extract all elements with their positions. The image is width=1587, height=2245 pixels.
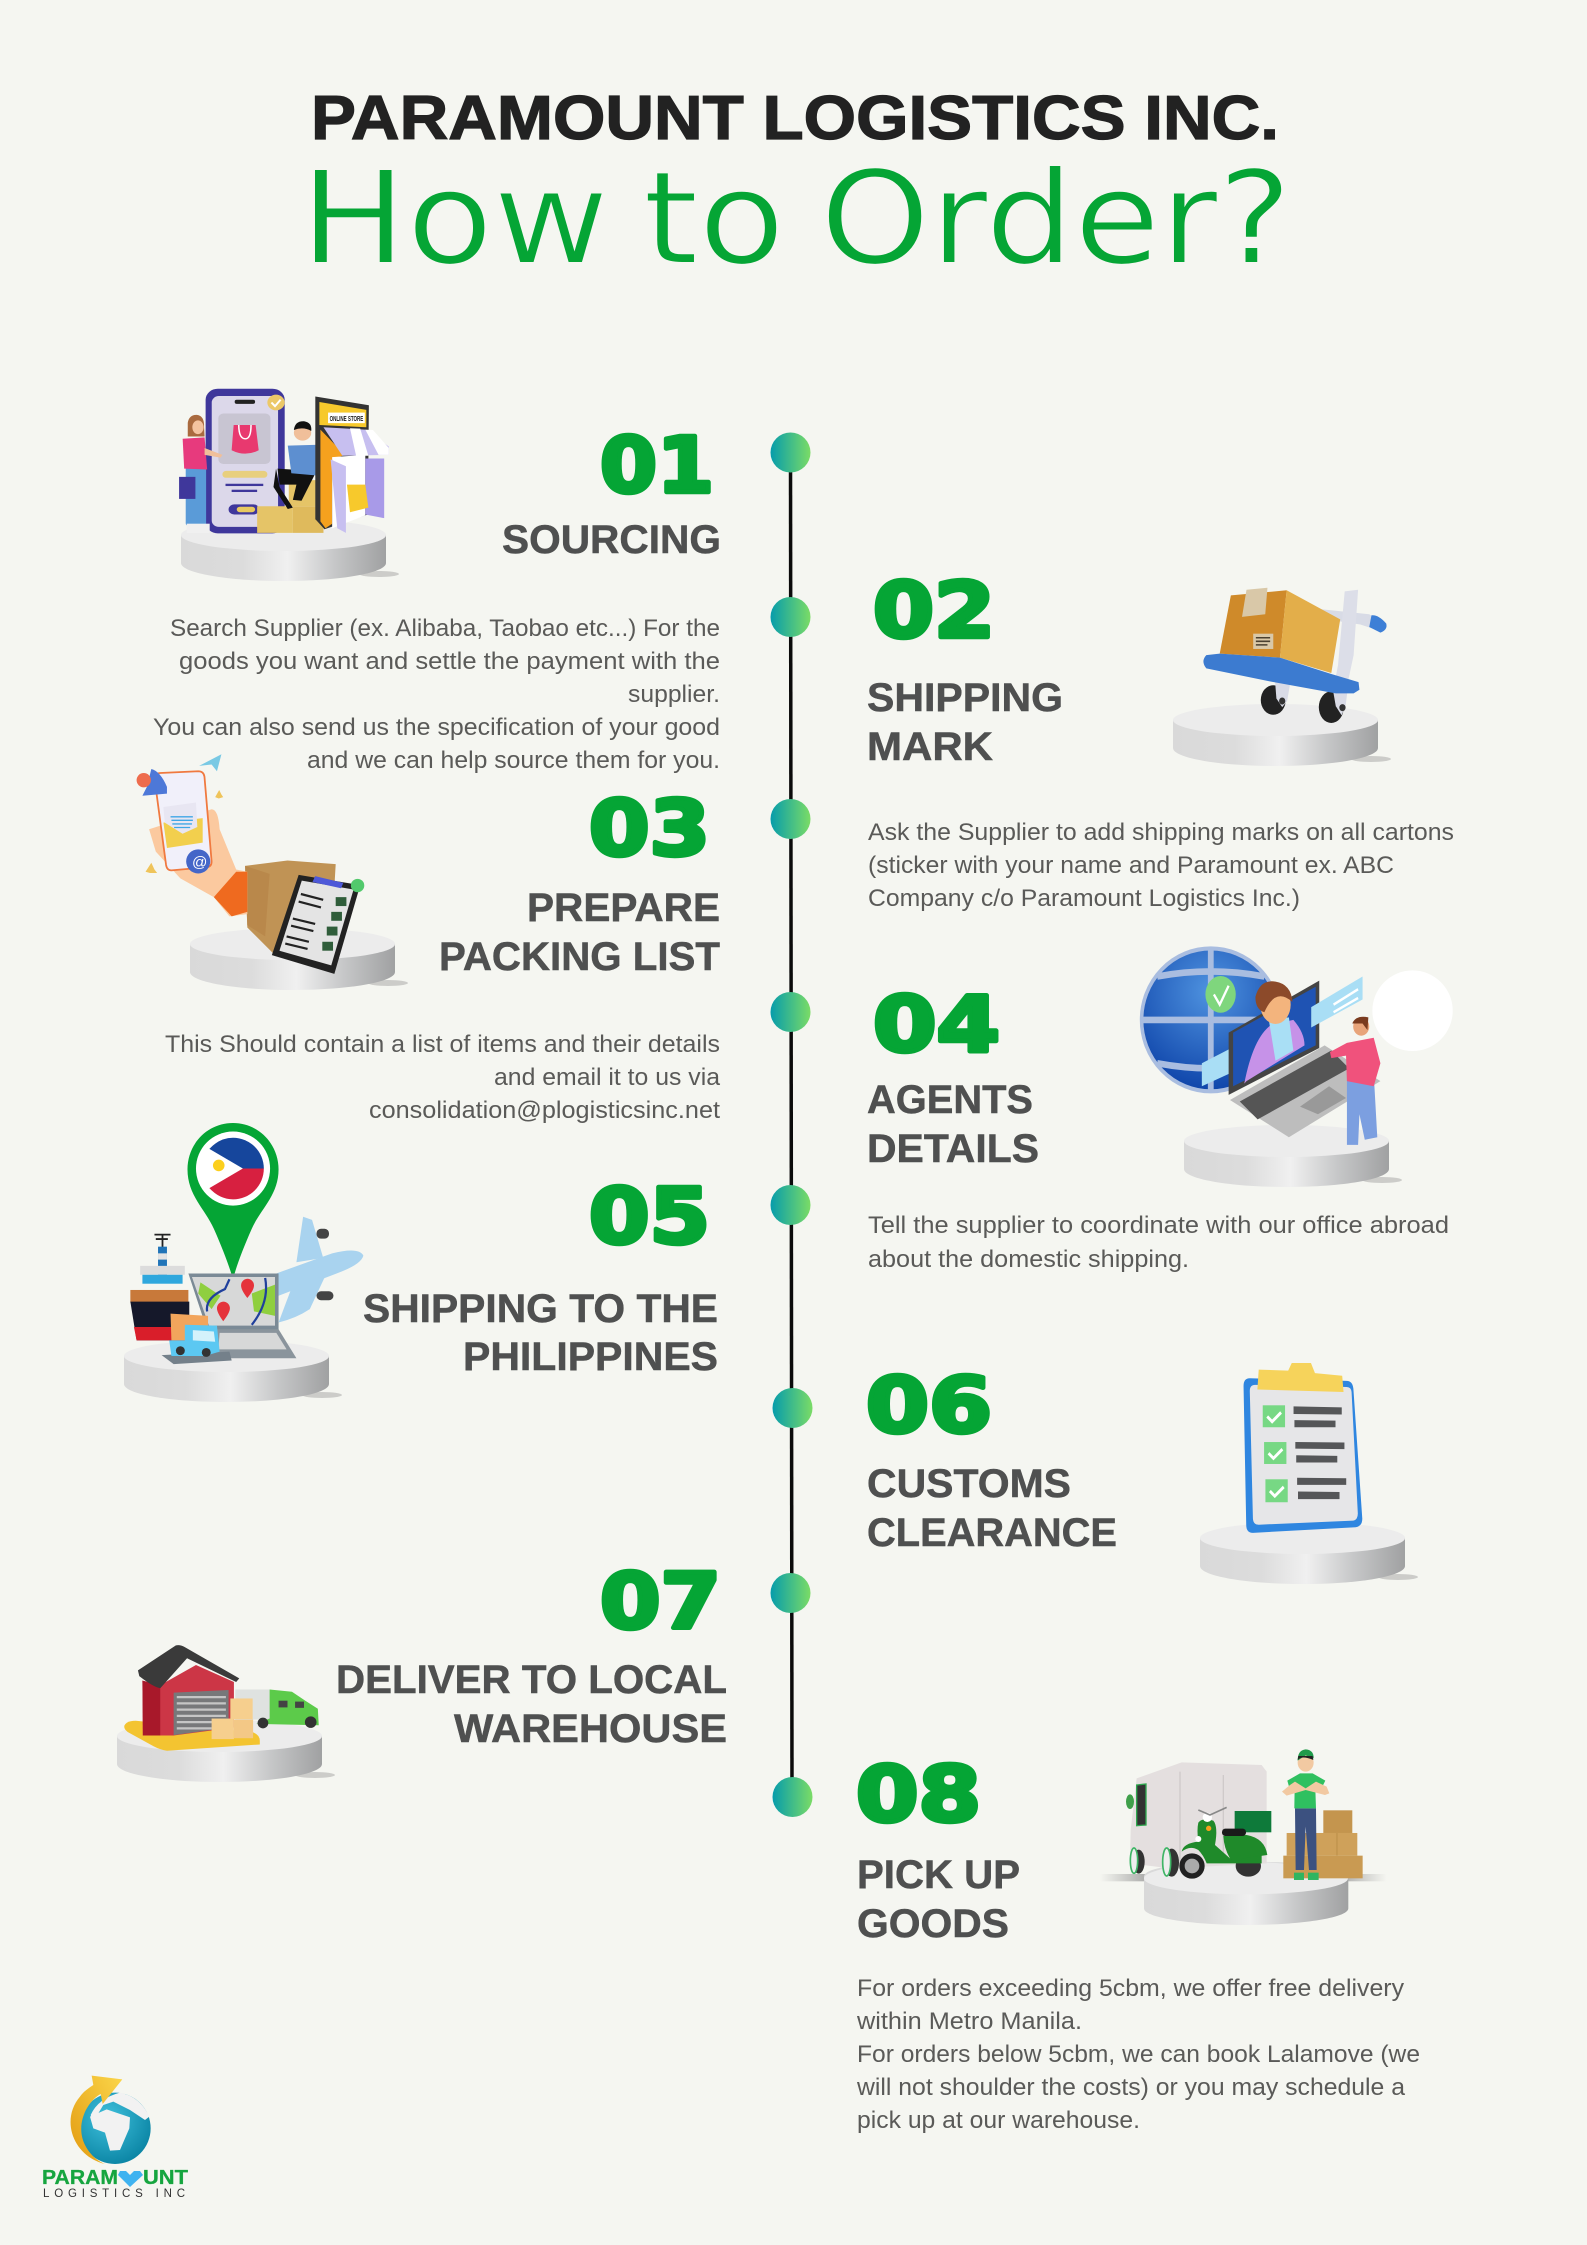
- logo wordmark end: UNT: [143, 2166, 189, 2189]
- number 02: 02: [873, 567, 995, 656]
- text block: sourcing description: Search Supplier (ex. Alibaba, Taobao etc...) For the: [170, 615, 720, 642]
- icon: phone in hand, box and clipboard: @: [192, 854, 207, 871]
- logo wordmark: PARAM: [42, 2166, 118, 2189]
- text block: pick up goods description: For orders below 5cbm, we can book Lalamove (we: [857, 2041, 1420, 2068]
- text block: agents details description: about the domestic shipping.: [868, 1246, 1189, 1273]
- number 05: 05: [589, 1173, 710, 1262]
- title: How to Order: How: [300, 144, 609, 294]
- pedestal: [190, 928, 408, 990]
- logo subtitle: LOGISTICS INC: [43, 2188, 185, 2200]
- title: How to Order: Order?: [820, 144, 1292, 294]
- number 08: 08: [856, 1751, 981, 1840]
- heading: customs clearance: CLEARANCE: [867, 1511, 1117, 1555]
- pedestal: [117, 1720, 335, 1782]
- number 07: 07: [600, 1558, 721, 1647]
- text block: shipping mark description: [868, 819, 1454, 912]
- heading: deliver to local warehouse: WAREHOUSE: [454, 1707, 727, 1751]
- heading: shipping mark: MARK: [867, 725, 993, 769]
- number 04: 04: [873, 981, 1000, 1070]
- icon: hand truck with box: [1203, 588, 1387, 723]
- icon: phone in hand, box and clipboard: [137, 754, 364, 974]
- pedestal: [124, 1340, 342, 1402]
- text block: sourcing description: goods you want and settle the payment with the: [179, 648, 720, 675]
- pedestal: [1184, 1125, 1402, 1187]
- heading: customs clearance: [867, 1462, 1117, 1555]
- text block: packing list description: consolidation@plogisticsinc.net: [369, 1097, 720, 1124]
- heading: shipping to the philippines: PHILIPPINES: [463, 1335, 718, 1379]
- icon: globe, laptop agent and customer: [1142, 948, 1453, 1145]
- icon: globe with arrow: [71, 2076, 151, 2164]
- heading: agents details: DETAILS: [867, 1127, 1039, 1171]
- text block: shipping mark description: Ask the Supplier to add shipping marks on all cartons: [868, 819, 1454, 846]
- heading: prepare packing list: PACKING LIST: [439, 935, 720, 979]
- panel: step 08 pick up goods: [856, 1749, 1420, 2134]
- number 06: 06: [866, 1362, 992, 1451]
- text block: shipping mark description: Company c/o Paramount Logistics Inc.): [868, 885, 1300, 912]
- number 03: 03: [589, 785, 710, 874]
- panel: step 01 sourcing: [153, 389, 721, 774]
- logo: Paramount Logistics Inc: [42, 2076, 189, 2200]
- panel: step 07 deliver to local warehouse: [117, 1558, 727, 1782]
- icon: online store with shoppers: [179, 389, 389, 533]
- panel: step 02 shipping mark: [867, 567, 1454, 912]
- text block: sourcing description: and we can help source them for you.: [307, 747, 720, 774]
- text block: shipping mark description: (sticker with your name and Paramount ex. ABC: [868, 852, 1394, 879]
- text block: pick up goods description: within Metro Manila.: [856, 2008, 1082, 2035]
- text block: pick up goods description: pick up at our warehouse.: [857, 2107, 1140, 2134]
- text block: sourcing description: supplier.: [628, 681, 720, 708]
- heading: customs clearance: CUSTOMS: [867, 1462, 1071, 1506]
- pedestal: [1173, 704, 1391, 766]
- icon: diamond: [118, 2171, 143, 2187]
- heading: shipping to the philippines: SHIPPING TO THE: [363, 1287, 718, 1331]
- title: company name: PARAMOUNT LOGISTICS INC.: [311, 84, 1279, 153]
- panel: step 03 prepare packing list: [137, 754, 720, 1124]
- timeline: vertical line and step markers: [770, 432, 812, 1817]
- title: How to Order: [300, 144, 1292, 294]
- text block: pick up goods description: [856, 1975, 1420, 2134]
- text block: pick up goods description: will not shoulder the costs) or you may schedule a: [856, 2074, 1405, 2101]
- heading: shipping mark: SHIPPING: [867, 676, 1063, 720]
- text block: packing list description: This Should contain a list of items and their details: [165, 1031, 720, 1058]
- heading: pick up goods: PICK UP: [857, 1853, 1020, 1897]
- text block: sourcing description: [153, 615, 720, 774]
- panel: step 06 customs clearance: [866, 1362, 1418, 1584]
- title: How to Order: to: [643, 144, 785, 294]
- heading: prepare packing list: [439, 886, 720, 979]
- heading: deliver to local warehouse: DELIVER TO LOCAL: [336, 1658, 727, 1702]
- heading: sourcing: SOURCING: [502, 518, 721, 562]
- heading: pick up goods: [857, 1853, 1020, 1946]
- heading: agents details: [867, 1078, 1039, 1171]
- text block: agents details description: [868, 1212, 1449, 1273]
- icon: online store with shoppers: ONLINE STORE: [330, 414, 363, 423]
- icon: delivery van, scooter, courier, boxes and pedestal: [1100, 1749, 1387, 1925]
- pedestal: [181, 519, 399, 581]
- heading: shipping mark: [867, 676, 1063, 769]
- icon: location pin, ship, plane, laptop and truck: [130, 1123, 363, 1364]
- heading: agents details: AGENTS: [867, 1078, 1033, 1122]
- white circle: [1372, 970, 1453, 1051]
- number 01: 01: [600, 422, 714, 511]
- panel: step 05 shipping to the philippines: [124, 1123, 718, 1402]
- icon: warehouse with truck: [124, 1645, 319, 1751]
- heading: deliver to local warehouse: [336, 1658, 727, 1751]
- text block: pick up goods description: For orders exceeding 5cbm, we offer free delivery: [857, 1975, 1405, 2002]
- text block: sourcing description: You can also send us the specification of your good: [153, 714, 720, 741]
- text block: agents details description: Tell the supplier to coordinate with our office abroad: [868, 1212, 1449, 1239]
- text block: packing list description: and email it to us via: [494, 1064, 720, 1091]
- pedestal: [1200, 1522, 1418, 1584]
- heading: shipping to the philippines: [363, 1287, 718, 1379]
- heading: prepare packing list: PREPARE: [527, 886, 720, 930]
- text block: packing list description: [165, 1031, 720, 1124]
- heading: pick up goods: GOODS: [857, 1902, 1009, 1946]
- panel: step 04 agents details: [867, 948, 1453, 1273]
- icon: checklist clipboard: [1244, 1363, 1362, 1533]
